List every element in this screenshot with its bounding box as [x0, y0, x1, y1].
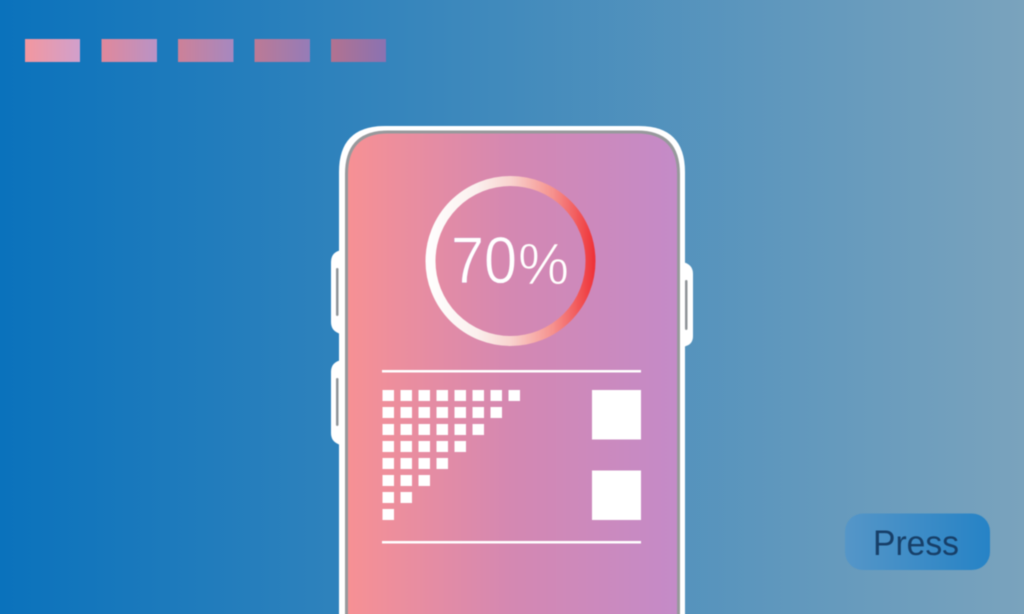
press button: [845, 514, 990, 570]
upper white square: [592, 390, 641, 440]
pagination bars: [25, 39, 386, 62]
top divider: [382, 370, 641, 372]
phone: [331, 126, 693, 614]
percentage label: 70: [451, 223, 517, 297]
percentage label: [451, 223, 569, 297]
percentage label: %: [518, 232, 569, 297]
lower white square: [592, 470, 641, 520]
triangle dot grid: [382, 390, 520, 520]
phone screen: [346, 132, 678, 614]
left upper side button: [331, 250, 342, 335]
press label: Press: [873, 524, 959, 563]
phone body: [339, 126, 685, 614]
progress ring: [430, 181, 590, 341]
right side button: [682, 262, 693, 348]
bottom divider: [382, 541, 641, 544]
left lower side button: [331, 360, 342, 446]
